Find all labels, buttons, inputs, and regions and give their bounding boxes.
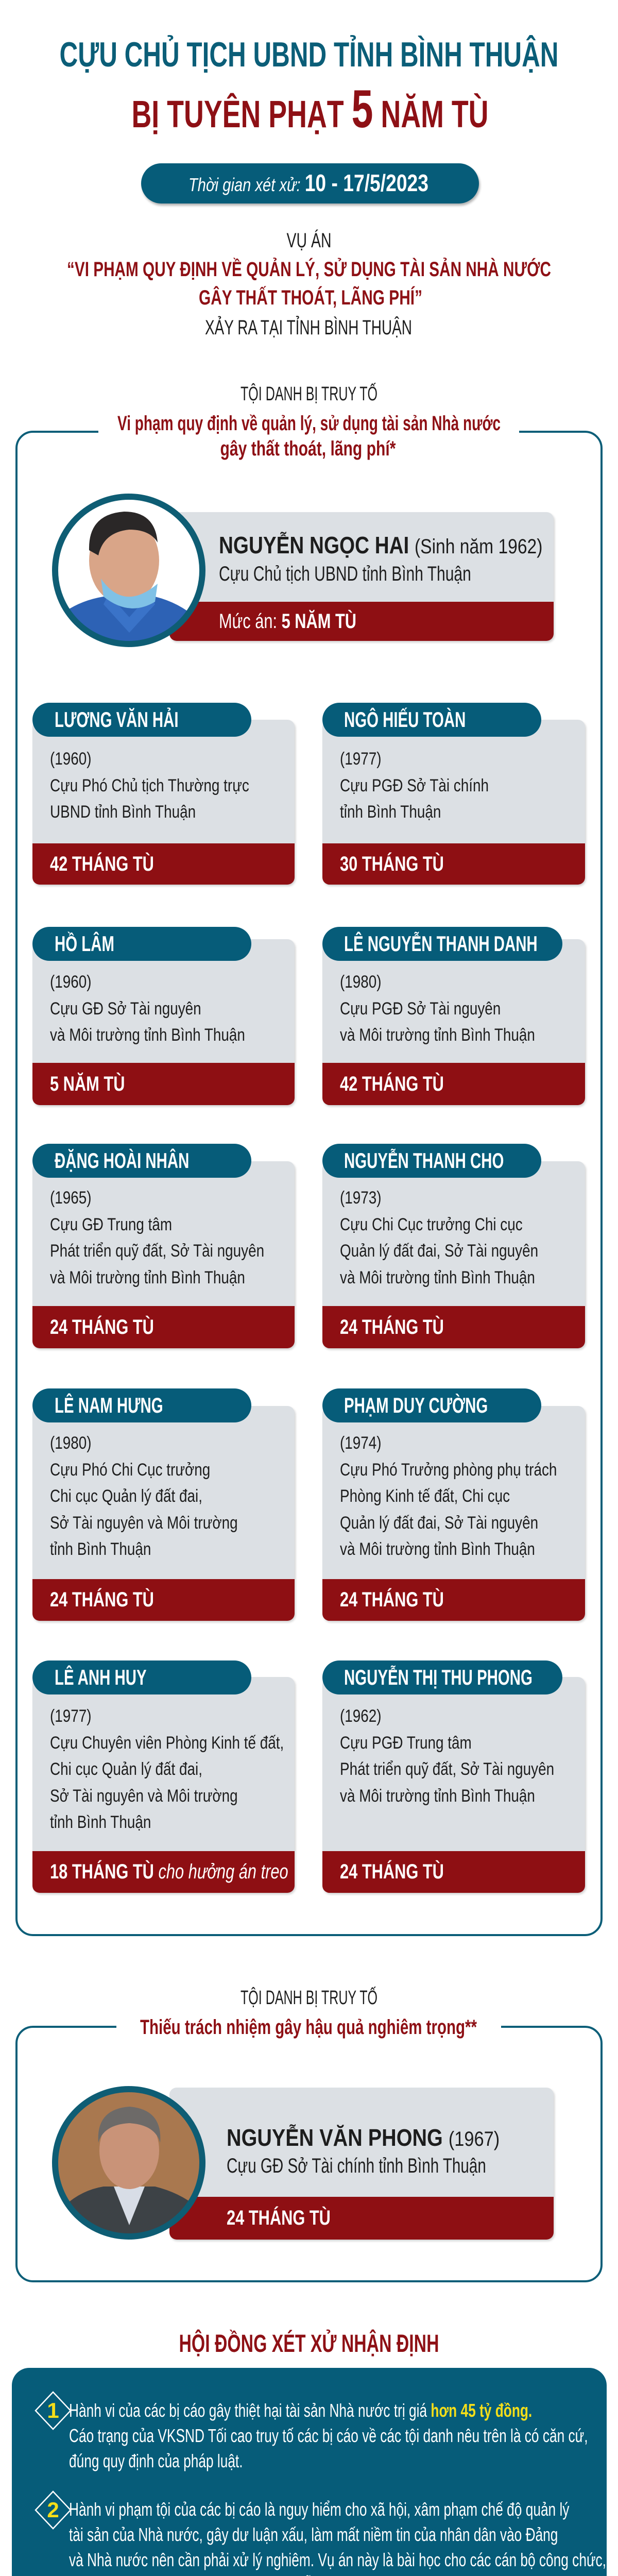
card: Lê Nam Hưng: (1980) (50, 1433, 92, 1453)
card: Ngô Hiếu Toàn (322, 703, 587, 887)
panel: court assessment points (12, 2368, 607, 2576)
card: Lê Nguyễn Thanh Danh: và Môi trường tỉnh Bình Thuận (340, 1025, 535, 1045)
heading: court assessment: HỘI ĐỒNG XÉT XỬ NHẬN ĐỊNH (179, 2329, 439, 2358)
card: Lê Anh Huy (32, 1660, 297, 1895)
card: Nguyễn Thị Thu Phong: Cựu PGĐ Trung tâm (340, 1733, 472, 1753)
card: Ngô Hiếu Toàn: tỉnh Bình Thuận (340, 802, 441, 822)
card: Đặng Hoài Nhân: và Môi trường tỉnh Bình Thuận (50, 1267, 245, 1287)
case description: VỤ ÁN (286, 229, 332, 252)
card: Lương Văn Hải: Cựu Phó Chủ tịch Thường trực (50, 776, 249, 795)
card: Nguyễn Thanh Cho: Cựu Chi Cục trưởng Chi cục (340, 1215, 523, 1234)
card: Lê Nam Hưng (32, 1388, 297, 1623)
case description: GÂY THẤT THOÁT, LÃNG PHÍ” (199, 285, 422, 309)
card: Nguyễn Thị Thu Phong: NGUYỄN THỊ THU PHONG (344, 1665, 533, 1689)
card: Lê Anh Huy: Cựu Chuyên viên Phòng Kinh tế đất, (50, 1733, 284, 1753)
card: Lê Nguyễn Thanh Danh: Cựu PGĐ Sở Tài nguyên (340, 998, 501, 1018)
icon: diamond 1: 1 (47, 2398, 59, 2422)
card: Hồ Lâm: (1960) (50, 972, 92, 992)
card: Nguyễn Thanh Cho (322, 1144, 587, 1351)
card: Hồ Lâm: và Môi trường tỉnh Bình Thuận (50, 1025, 245, 1045)
card: Ngô Hiếu Toàn: NGÔ HIẾU TOÀN (344, 707, 466, 732)
card: Hồ Lâm: HỒ LÂM (55, 931, 114, 956)
card: Lương Văn Hải: LƯƠNG VĂN HẢI (55, 707, 179, 732)
date pill: Thời gian xét xử: 10 - 17/5/2023 (188, 170, 428, 196)
title (60, 35, 558, 139)
card: Lương Văn Hải: 42 THÁNG TÙ (50, 853, 154, 875)
card: Lê Nam Hưng: tỉnh Bình Thuận (50, 1539, 151, 1559)
card: Đặng Hoài Nhân: 24 THÁNG TÙ (50, 1316, 154, 1338)
icon: diamond 2: 2 (47, 2498, 59, 2522)
point 2: tài sản của Nhà nước, gây dư luận xấu, làm mất niềm tin của nhân dân vào Đảng (69, 2524, 558, 2545)
card: Đặng Hoài Nhân: Phát triển quỹ đất, Sở Tài nguyên (50, 1241, 264, 1261)
card: Phạm Duy Cường: và Môi trường tỉnh Bình Thuận (340, 1539, 535, 1559)
card: Đặng Hoài Nhân (32, 1144, 297, 1351)
card: Lê Nguyễn Thanh Danh: (1980) (340, 972, 382, 992)
card: Lê Nam Hưng: LÊ NAM HƯNG (55, 1393, 163, 1417)
card: Đặng Hoài Nhân: ĐẶNG HOÀI NHÂN (55, 1148, 189, 1173)
card: Nguyễn Thị Thu Phong: 24 THÁNG TÙ (340, 1860, 444, 1883)
defendant card: Nguyễn Văn Phong: 24 THÁNG TÙ (227, 2207, 331, 2229)
card: Phạm Duy Cường: Phòng Kinh tế đất, Chi cục (340, 1486, 510, 1506)
point 2: và Nhà nước nên cần phải xử lý nghiêm. Vụ án này là bài học cho các cán bộ công chức, (69, 2549, 606, 2570)
point 1: Cáo trạng của VKSND Tối cao truy tố các bị cáo về các tội danh nêu trên là có căn cứ, (69, 2425, 588, 2446)
card: Lê Nam Hưng: Chi cục Quản lý đất đai, (50, 1486, 202, 1506)
card: Phạm Duy Cường (322, 1388, 587, 1623)
main defendant card: Nguyễn Ngọc Hai: Cựu Chủ tịch UBND tỉnh Bình Thuận (219, 563, 471, 585)
card: Lê Anh Huy: LÊ ANH HUY (55, 1665, 147, 1689)
card: Lê Nam Hưng: Sở Tài nguyên và Môi trường (50, 1513, 238, 1532)
charge subtitle 1: gây thất thoát, lãng phí* (220, 437, 396, 460)
card: Nguyễn Thị Thu Phong: và Môi trường tỉnh Bình Thuận (340, 1786, 535, 1805)
card: Ngô Hiếu Toàn: (1977) (340, 749, 382, 769)
title: BỊ TUYÊN PHẠT 5 NĂM TÙ (131, 79, 488, 139)
charge subtitle 2: Thiếu trách nhiệm gây hậu quả nghiêm trọng** (140, 2016, 477, 2039)
name and title: NGUYỄN NGỌC HAI (Sinh năm 1962) (219, 532, 542, 558)
card: Lê Anh Huy: 18 THÁNG TÙ cho hưởng án treo (50, 1860, 288, 1883)
point 2 (35, 2490, 606, 2576)
icon: diamond 1 (35, 2391, 70, 2430)
card: Nguyễn Thị Thu Phong: Phát triển quỹ đất, Sở Tài nguyên (340, 1759, 554, 1779)
card: Lê Nam Hưng: Cựu Phó Chi Cục trưởng (50, 1460, 210, 1480)
date pill (141, 163, 479, 204)
defendant card: Nguyễn Văn Phong: Cựu GĐ Sở Tài chính tỉnh Bình Thuận (227, 2155, 486, 2177)
point 1: đúng quy định của pháp luật. (69, 2450, 243, 2471)
card: Phạm Duy Cường: PHẠM DUY CƯỜNG (344, 1393, 488, 1417)
card: Phạm Duy Cường: Quản lý đất đai, Sở Tài nguyên (340, 1513, 538, 1532)
card: Lê Anh Huy: tỉnh Bình Thuận (50, 1812, 151, 1832)
section heading 2: TỘI DANH BỊ TRUY TỐ (241, 1986, 377, 2009)
main defendant card: Nguyễn Ngọc Hai: Mức án: 5 NĂM TÙ (219, 610, 356, 633)
card: Lương Văn Hải: UBND tỉnh Bình Thuận (50, 802, 196, 822)
card: Ngô Hiếu Toàn: 30 THÁNG TÙ (340, 853, 444, 875)
panel: defendants charged under article 219 (15, 431, 603, 1936)
section heading 1: TỘI DANH BỊ TRUY TỐ (241, 382, 377, 405)
defendant card: Nguyễn Văn Phong (52, 2086, 556, 2242)
card: Nguyễn Thị Thu Phong (322, 1660, 587, 1895)
card: Lê Anh Huy: Sở Tài nguyên và Môi trường (50, 1786, 238, 1805)
card: Hồ Lâm: 5 NĂM TÙ (50, 1073, 125, 1095)
card: Nguyễn Thanh Cho: NGUYỄN THANH CHO (344, 1148, 504, 1173)
card: Nguyễn Thanh Cho: 24 THÁNG TÙ (340, 1316, 444, 1338)
card: Lê Anh Huy: (1977) (50, 1706, 92, 1726)
point 1: Hành vi của các bị cáo gây thiệt hại tài sản Nhà nước trị giá hơn 45 tỷ đồng. (69, 2400, 532, 2421)
panel: defendant charged under article 360 (15, 2026, 603, 2282)
point 2: Hành vi phạm tội của các bị cáo là nguy hiểm cho xã hội, xâm phạm chế độ quản lý (69, 2499, 569, 2520)
card: Lương Văn Hải (32, 703, 297, 887)
photo: Nguyễn Văn Phong (52, 2086, 205, 2240)
card: Hồ Lâm: Cựu GĐ Sở Tài nguyên (50, 998, 201, 1018)
card: Lê Nguyễn Thanh Danh: 42 THÁNG TÙ (340, 1073, 444, 1095)
card: Phạm Duy Cường: 24 THÁNG TÙ (340, 1588, 444, 1611)
card: Nguyễn Thanh Cho: Quản lý đất đai, Sở Tài nguyên (340, 1241, 538, 1261)
card: Nguyễn Thanh Cho: (1973) (340, 1188, 382, 1208)
card: Nguyễn Thị Thu Phong: (1962) (340, 1706, 382, 1726)
name and title: NGUYỄN VĂN PHONG (1967) (227, 2124, 500, 2151)
case description (67, 229, 551, 339)
charge subtitle 1 (117, 412, 501, 460)
case description: XẢY RA TẠI TỈNH BÌNH THUẬN (205, 315, 412, 339)
card: Hồ Lâm (32, 927, 297, 1108)
card: Nguyễn Thanh Cho: và Môi trường tỉnh Bình Thuận (340, 1267, 535, 1287)
card: Lê Nam Hưng: 24 THÁNG TÙ (50, 1588, 154, 1611)
card: Lê Anh Huy: Chi cục Quản lý đất đai, (50, 1759, 202, 1779)
card: Ngô Hiếu Toàn: Cựu PGĐ Sở Tài chính (340, 776, 489, 795)
card: Phạm Duy Cường: Cựu Phó Trưởng phòng phụ trách (340, 1460, 557, 1480)
card: Đặng Hoài Nhân: (1965) (50, 1188, 92, 1208)
card: Lê Nguyễn Thanh Danh: LÊ NGUYỄN THANH DANH (344, 931, 538, 956)
photo: Nguyễn Ngọc Hai (52, 494, 205, 647)
point 1 (35, 2391, 588, 2471)
card: Lê Nguyễn Thanh Danh (322, 927, 587, 1108)
card: Lương Văn Hải: (1960) (50, 749, 92, 769)
main defendant card: Nguyễn Ngọc Hai (52, 494, 556, 647)
icon: diamond 2 (35, 2490, 72, 2530)
card: Phạm Duy Cường: (1974) (340, 1433, 382, 1453)
card: Đặng Hoài Nhân: Cựu GĐ Trung tâm (50, 1215, 172, 1234)
